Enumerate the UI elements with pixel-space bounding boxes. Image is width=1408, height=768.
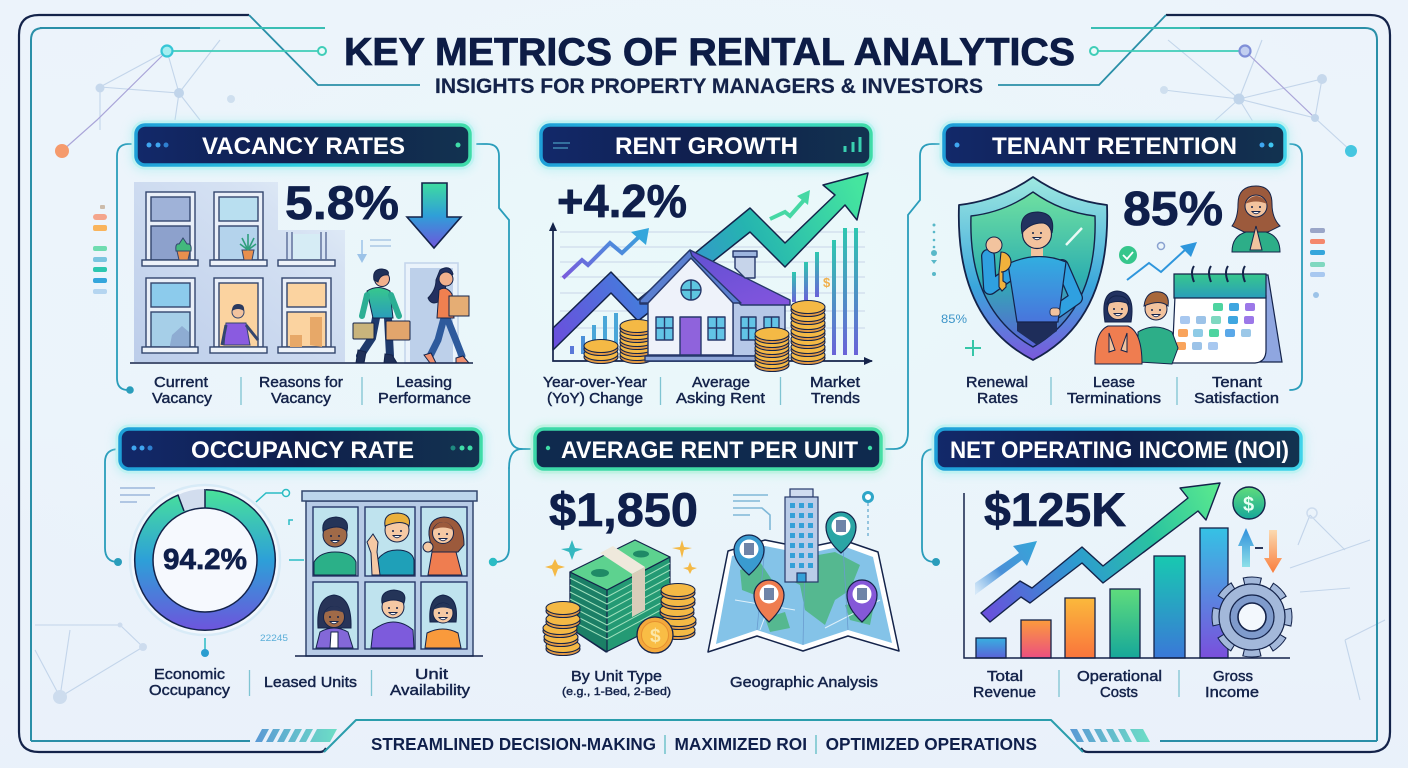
chart: left bars: [570, 313, 618, 354]
labels: average rent: Geographic Analysis: [730, 675, 878, 691]
panel: average rent per unit: [530, 425, 899, 698]
illustration: shield with tenant: [959, 177, 1107, 360]
illustration: office tower: [785, 489, 818, 582]
header: average rent per unit: [530, 425, 886, 475]
header: vacancy rates: [131, 121, 475, 171]
footer stripes left: [255, 729, 337, 742]
person in window: [224, 323, 250, 345]
labels: tenant retention: Terminations: [1067, 391, 1161, 407]
donut note lines: [120, 488, 155, 502]
left network decoration: [55, 40, 235, 158]
tenant trousers: [1017, 322, 1057, 345]
value: $1,850: $1,850: [549, 483, 698, 536]
illustration: coins left: [584, 320, 654, 364]
header: rent growth: [536, 121, 876, 171]
illustration: building windows: [134, 182, 345, 362]
sparkles: [545, 540, 697, 577]
illustration: house: [640, 250, 790, 361]
labels: average rent: [562, 669, 878, 698]
chart: small arrow: [975, 541, 1037, 595]
labels: tenant retention: [966, 375, 1279, 407]
labels: occupancy: Occupancy: [149, 683, 231, 699]
panel: tenant retention: [931, 121, 1290, 407]
labels: occupancy: Leased Units: [264, 675, 357, 691]
value: 5.8%: 5.8%: [285, 176, 399, 229]
labels: NOI: [973, 669, 1259, 701]
person F: [425, 595, 461, 648]
panel: net operating income: [931, 425, 1306, 701]
icon: up arrow: [1238, 528, 1254, 567]
chart: bars: [976, 528, 1228, 658]
left side colour bars: [93, 205, 107, 294]
illustration: map: [708, 540, 899, 652]
person D: [316, 595, 353, 648]
header: tenant retention: TENANT RETENTION: [992, 133, 1237, 160]
panel: vacancy rates: [130, 121, 475, 407]
arrow: down: [407, 183, 461, 248]
header: vacancy rates: VACANCY RATES: [202, 133, 405, 160]
icon: gear: [1217, 582, 1287, 652]
labels: NOI: Income: [1205, 685, 1259, 701]
small stat: 85%: 85%: [941, 314, 967, 326]
labels: rent growth: (YoY) Change: [547, 391, 643, 407]
person B: [367, 513, 414, 575]
header: occupancy rate: [115, 425, 486, 475]
chart: small green arrow: [770, 190, 810, 219]
illustration: smiling woman: [1232, 186, 1280, 252]
footer tagline: MAXIMIZED ROI: [674, 734, 807, 754]
labels: vacancy: Current: [154, 375, 208, 391]
footer tagline: OPTIMIZED OPERATIONS: [826, 734, 1037, 754]
person E: [371, 590, 414, 648]
panel: occupancy rate: [115, 425, 486, 699]
labels: occupancy: Economic: [154, 667, 225, 683]
illustration: couple: [1095, 291, 1178, 364]
map annotations: [733, 492, 872, 538]
right side colour bars: [1310, 228, 1325, 298]
labels: occupancy: Unit: [415, 667, 448, 683]
chart: grid lines: [560, 232, 865, 328]
labels: average rent: (e.g., 1-Bed, 2-Bed): [562, 686, 671, 698]
labels: NOI: Costs: [1100, 685, 1138, 701]
illustration: cash stack: [570, 540, 670, 652]
baseline: [130, 362, 473, 364]
chart: small purple-blue arrow: [563, 228, 649, 278]
header: NOI: [931, 425, 1306, 475]
person A: [314, 517, 356, 575]
labels: tenant retention: Rates: [977, 391, 1018, 407]
footer tagline: [371, 734, 1037, 754]
right network decoration: [1160, 40, 1357, 157]
labels: NOI: Operational: [1077, 669, 1162, 685]
labels: NOI: Gross: [1213, 669, 1253, 685]
plant pots: [177, 251, 190, 260]
labels: rent growth: Year-over-Year: [543, 375, 647, 391]
check badge: [1119, 246, 1137, 264]
illustration: coins right: [755, 300, 825, 372]
labels: tenant retention: Tenant: [1212, 375, 1262, 391]
labels: vacancy: Vacancy: [152, 391, 213, 407]
labels: NOI: Revenue: [973, 685, 1036, 701]
header: average rent per unit: AVERAGE RENT PER UNIT: [561, 437, 858, 464]
illustration: calendar: [1172, 266, 1282, 363]
labels: occupancy: [149, 667, 471, 699]
dots decoration: [931, 224, 937, 276]
labels: tenant retention: Lease: [1093, 375, 1135, 391]
chart: occupancy donut: [130, 485, 280, 635]
tenant hand and key: [986, 237, 1060, 316]
icon: minus: [1255, 547, 1263, 549]
footer tagline: STREAMLINED DECISION-MAKING: [371, 734, 656, 754]
chart: rising arrow: [981, 483, 1220, 622]
icon: dollar coin: [1233, 487, 1265, 519]
labels: rent growth: Market: [810, 375, 860, 391]
value: +4.2%: +4.2%: [557, 175, 687, 227]
small ring: [1158, 242, 1164, 250]
value: 94.2%: 94.2%: [163, 544, 247, 576]
plus icon: [965, 340, 981, 356]
title: KEY METRICS OF RENTAL ANALYTICS: [344, 31, 1075, 74]
header: occupancy rate: OCCUPANCY RATE: [191, 437, 414, 464]
header: NOI: NET OPERATING INCOME (NOI): [950, 437, 1289, 464]
labels: average rent: By Unit Type: [571, 669, 662, 685]
illustration: coin stacks: $: [650, 626, 661, 647]
panel connectors: [105, 144, 1302, 566]
chart: axes: [964, 493, 1290, 658]
illustration: door: [405, 263, 458, 363]
labels: rent growth: [543, 375, 860, 407]
labels: rent growth: Trends: [811, 391, 860, 407]
lower right network decoration: [1290, 508, 1385, 700]
trend arrow: [1127, 242, 1197, 280]
small note: 22245: [260, 633, 288, 644]
person C: [423, 517, 464, 575]
chart: growth arrow: [553, 173, 868, 350]
labels: NOI: Total: [987, 669, 1023, 685]
donut connector: [201, 490, 304, 657]
labels: vacancy: [152, 375, 471, 407]
labels: rent growth: Asking Rent: [676, 391, 765, 407]
illustration: tenants moving out: [353, 268, 469, 363]
header: tenant retention: [939, 121, 1290, 171]
labels: vacancy: Reasons for: [259, 375, 343, 391]
labels: vacancy: Leasing: [396, 375, 452, 391]
labels: tenant retention: Satisfaction: [1194, 391, 1279, 407]
map pins: [734, 512, 877, 622]
illustration: apartment tenants: [295, 491, 483, 656]
tenant head: [1021, 212, 1053, 256]
tenant arms and torso: [988, 256, 1076, 322]
footer stripes right: [1070, 729, 1150, 742]
small down arrow and lines: [357, 240, 391, 263]
lower left network decoration: [35, 622, 147, 704]
labels: tenant retention: Renewal: [966, 375, 1028, 391]
labels: vacancy: Performance: [378, 391, 471, 407]
icon: dollar coin: $: [1243, 494, 1254, 516]
chart: right bars: [792, 228, 858, 355]
illustration: coin stacks: [543, 584, 696, 656]
panel: rent growth: [536, 121, 876, 407]
icon: down arrow: [1264, 530, 1282, 573]
value: 85%: 85%: [1123, 183, 1223, 236]
value: $125K: $125K: [984, 483, 1126, 536]
axes: [549, 222, 873, 365]
labels: vacancy: Vacancy: [271, 391, 332, 407]
header: rent growth: RENT GROWTH: [615, 133, 798, 160]
labels: occupancy: Availability: [390, 683, 471, 699]
labels: rent growth: Average: [692, 375, 750, 391]
dollar mark: $: [823, 275, 831, 290]
subtitle: INSIGHTS FOR PROPERTY MANAGERS & INVESTORS: [435, 75, 983, 98]
